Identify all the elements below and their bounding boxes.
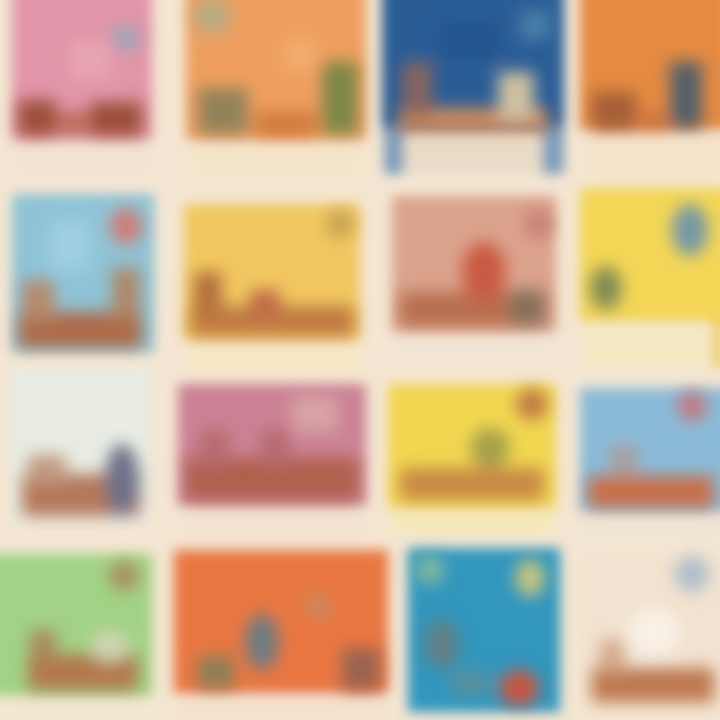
panel: row 3 mauve poster (178, 384, 366, 538)
panel: row 1 orange poster (186, 0, 366, 180)
panel: row 2 dusty pink poster (392, 196, 556, 368)
panel: row 4 green poster (0, 554, 152, 720)
panel: row 1 blue poster (382, 0, 564, 174)
panel: row 1 pink poster (12, 0, 152, 172)
panel: row 3 light blue poster (580, 388, 720, 540)
panel: row 2 yellow poster (184, 204, 360, 372)
panel: row 4 teal poster (408, 548, 560, 712)
panel: row 4 orange-red poster (174, 550, 388, 720)
panel: row 3 yellow poster (388, 384, 556, 532)
panel: row 1 orange poster right (580, 0, 720, 174)
panel: row 2 yellow poster right (580, 188, 720, 368)
panel: row 4 cream poster (584, 554, 720, 710)
panel: row 3 white poster (10, 368, 150, 524)
panel: row 2 light blue poster (12, 194, 154, 352)
